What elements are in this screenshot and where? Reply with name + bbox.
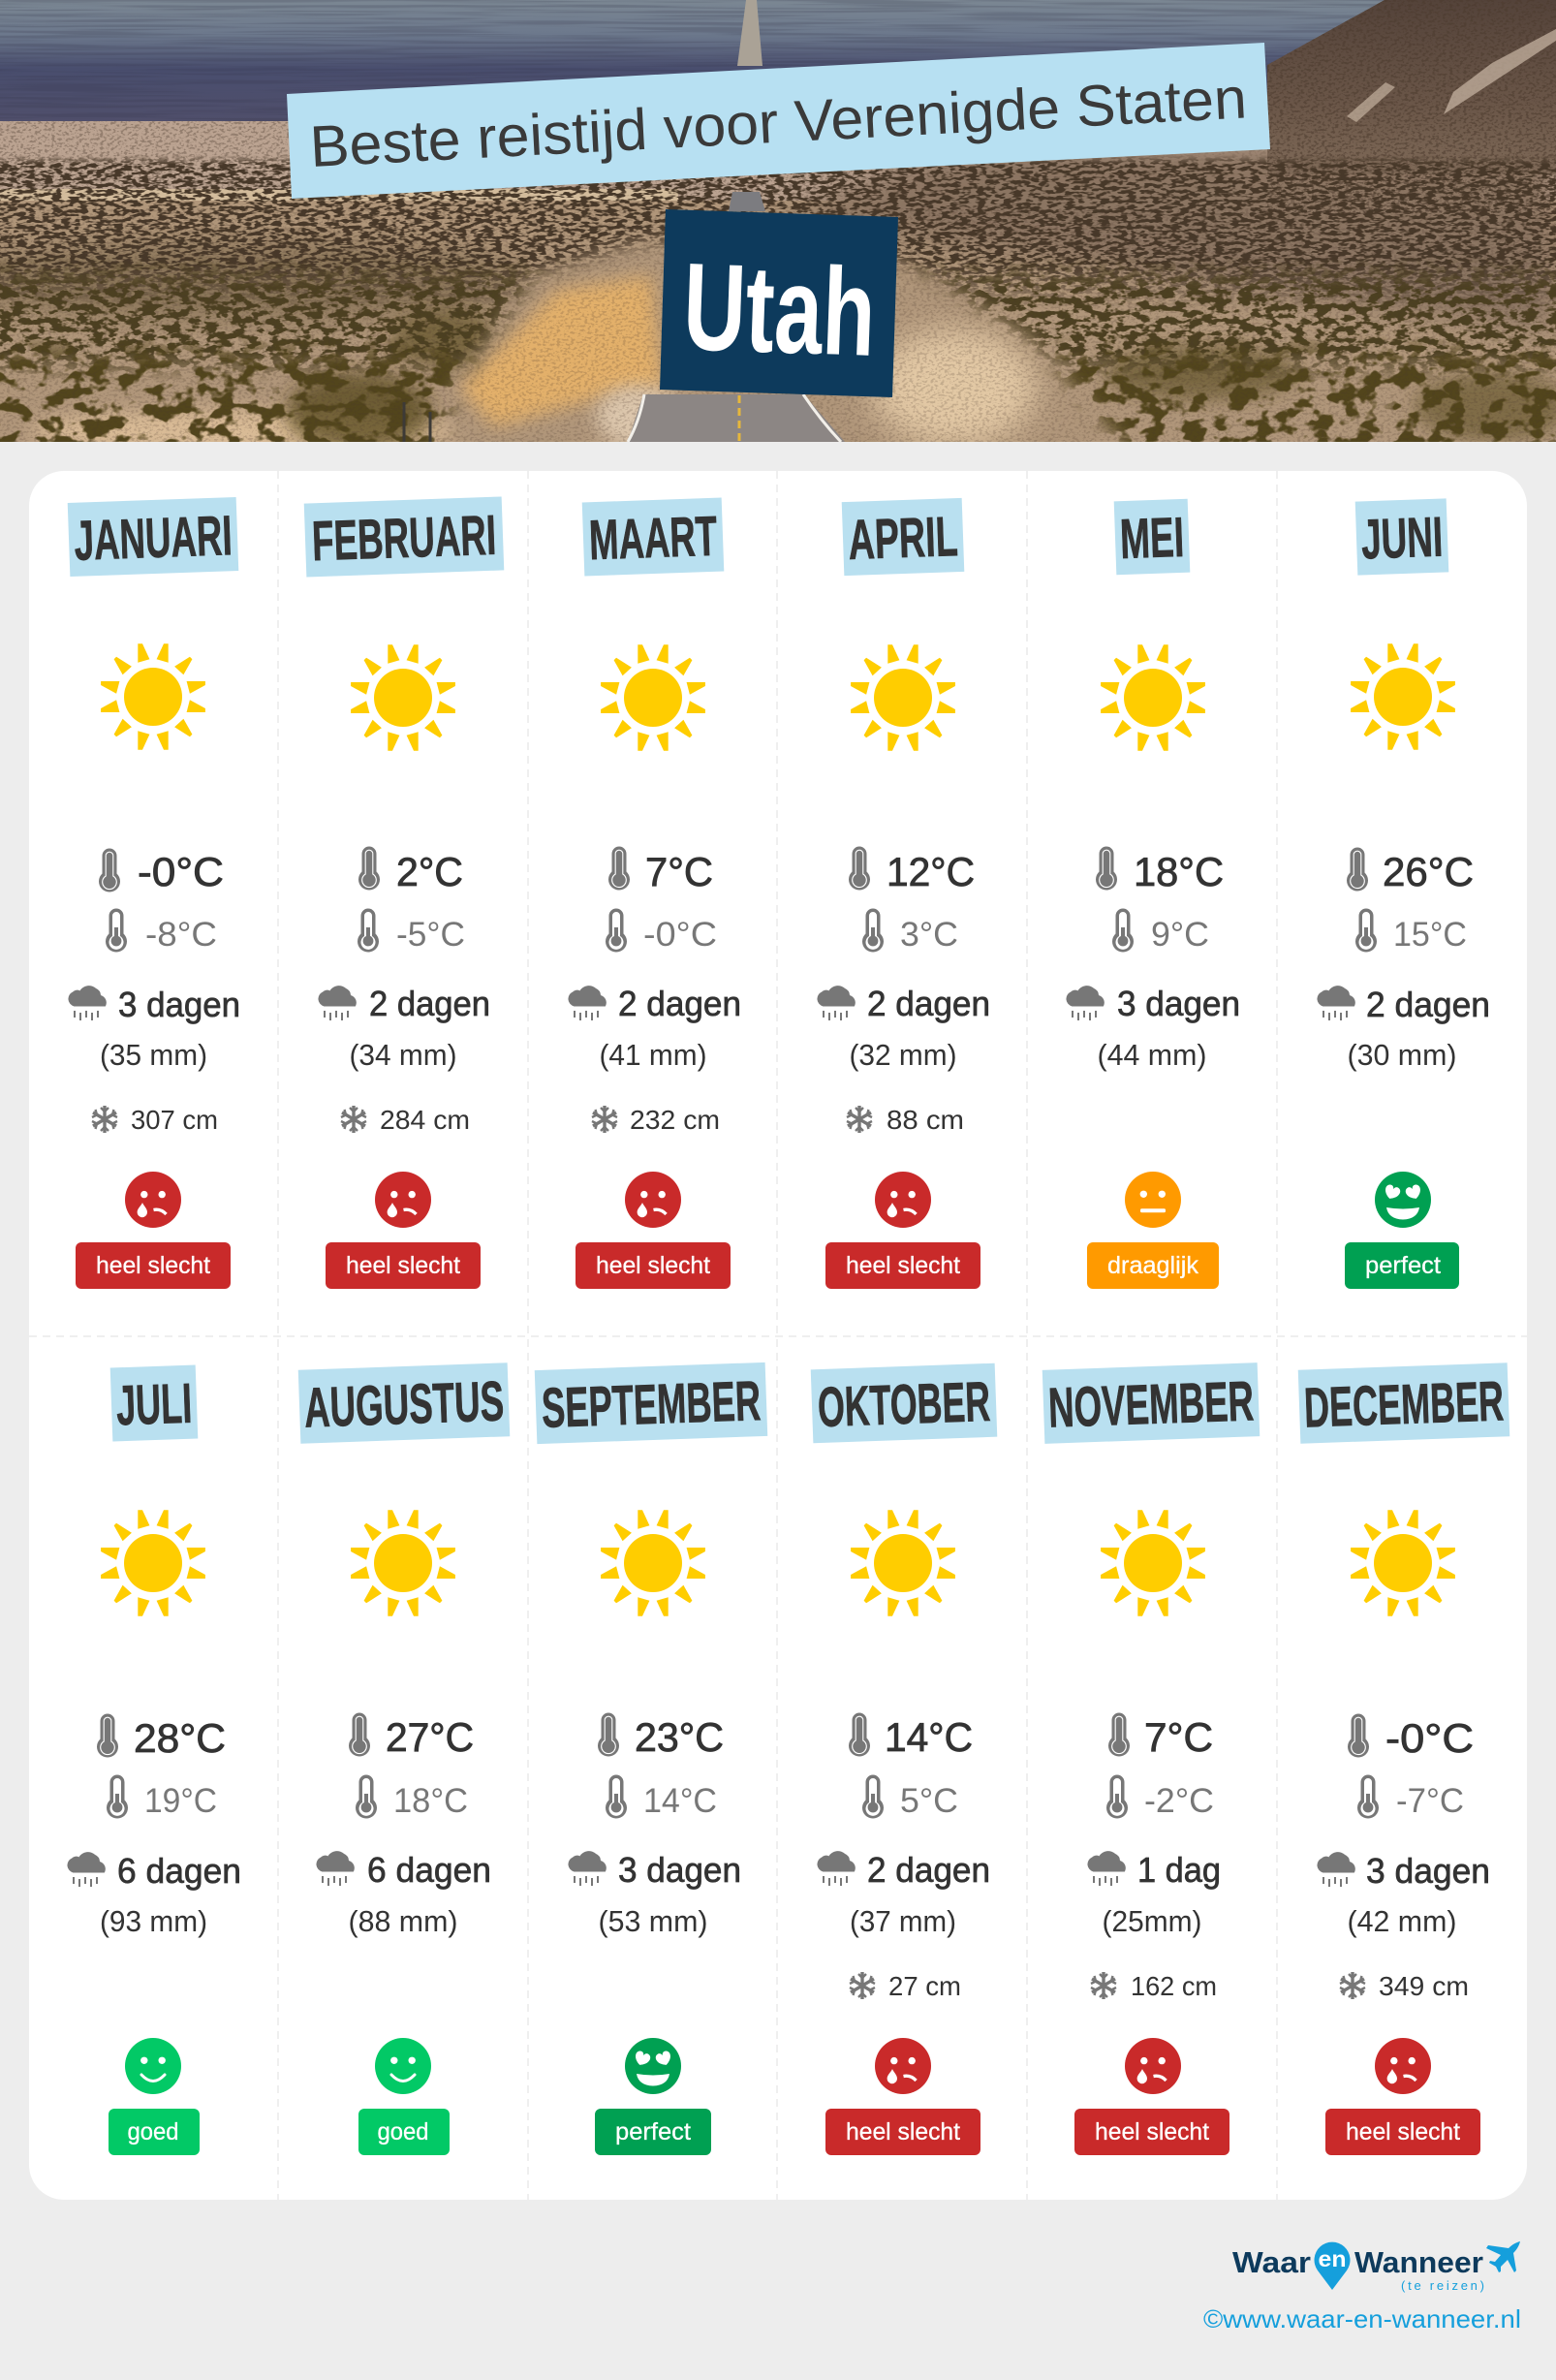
heading: OKTOBER — [817, 1370, 991, 1439]
min temperature: 9°C — [1151, 916, 1209, 954]
icon: sun — [1351, 643, 1455, 750]
month: December — [1298, 1362, 1509, 2155]
snow: 307 cm — [131, 1105, 218, 1135]
rating face — [875, 2038, 931, 2094]
heading — [1355, 498, 1448, 576]
heading — [1114, 499, 1190, 575]
max temperature — [1348, 1713, 1474, 1761]
rating badge — [109, 2109, 200, 2155]
icon: sun — [1101, 644, 1205, 751]
min temperature — [862, 1775, 958, 1820]
min temperature — [606, 909, 717, 954]
rating badge — [1074, 2109, 1229, 2155]
max temperature: -0°C — [1385, 1715, 1474, 1761]
rain days — [1087, 1850, 1221, 1890]
min temperature: 14°C — [643, 1782, 717, 1820]
rating badge — [825, 1242, 980, 1289]
icon: plane — [1486, 2241, 1520, 2272]
heading: MAART — [588, 505, 718, 572]
rating badge — [825, 2109, 980, 2155]
rating badge: heel slecht — [596, 1252, 710, 1279]
icon: sun — [601, 644, 705, 751]
rating face — [375, 1172, 431, 1228]
heading: FEBRUARI — [311, 504, 497, 573]
min temperature — [358, 909, 465, 954]
heading — [110, 1364, 198, 1442]
min temperature: 19°C — [144, 1782, 217, 1820]
max temperature — [1108, 1713, 1213, 1760]
min temperature — [1112, 909, 1209, 954]
min temperature — [862, 909, 958, 954]
min temperature — [1355, 909, 1467, 954]
icon: sun — [601, 1510, 705, 1616]
max temperature — [1347, 847, 1474, 894]
heading — [298, 1362, 510, 1444]
rating badge: heel slecht — [846, 1252, 960, 1279]
snow: 162 cm — [1131, 1971, 1217, 2001]
rating face — [1125, 2038, 1181, 2094]
rain days: 3 dagen — [1117, 984, 1240, 1023]
heading — [842, 498, 964, 576]
rainfall: (41 mm) — [599, 1038, 707, 1072]
rain days: 2 dagen — [369, 984, 490, 1023]
max temperature — [99, 849, 224, 894]
min temperature — [107, 1775, 217, 1820]
min temperature: 15°C — [1393, 916, 1467, 954]
rating badge: draaglijk — [1107, 1252, 1198, 1279]
rating badge — [326, 1242, 481, 1289]
month: Augustus — [298, 1362, 510, 2155]
rainfall: (44 mm) — [1097, 1038, 1207, 1072]
snow: 349 cm — [1379, 1971, 1469, 2001]
min temperature: -8°C — [145, 916, 217, 954]
max temperature: 12°C — [887, 849, 975, 894]
month: Maart — [568, 498, 741, 1289]
max temperature: 28°C — [134, 1715, 226, 1761]
rating badge: perfect — [1365, 1252, 1441, 1279]
rating face — [125, 1172, 181, 1228]
rating badge — [1325, 2109, 1480, 2155]
rating badge — [1087, 1242, 1219, 1289]
rating face — [125, 2038, 181, 2094]
rain days — [68, 985, 240, 1024]
rating face — [875, 1172, 931, 1228]
snow — [341, 1105, 470, 1135]
rain days: 3 dagen — [1366, 1851, 1490, 1891]
rating face — [1375, 1172, 1431, 1228]
icon: sun — [851, 644, 955, 751]
rating badge: heel slecht — [96, 1252, 210, 1279]
rainfall: (25mm) — [1103, 1904, 1201, 1938]
min temperature — [1106, 1775, 1214, 1820]
icon: map pin — [1314, 2242, 1351, 2290]
rain days: 6 dagen — [367, 1850, 491, 1890]
rating badge — [576, 1242, 731, 1289]
rating badge — [595, 2109, 711, 2155]
min temperature — [356, 1775, 468, 1820]
max temperature — [97, 1713, 226, 1761]
rain days: 2 dagen — [618, 984, 741, 1023]
heading — [304, 496, 504, 578]
heading: APRIL — [847, 505, 959, 572]
hero photo: desert road — [0, 0, 1556, 453]
rain days: 3 dagen — [618, 1850, 741, 1890]
min temperature — [106, 909, 217, 954]
rain days — [568, 984, 741, 1023]
max temperature — [1096, 847, 1224, 894]
icon: sun — [101, 1510, 205, 1616]
min temperature: 5°C — [900, 1782, 958, 1820]
rating badge — [76, 1242, 231, 1289]
rain days — [1066, 984, 1240, 1023]
month: Februari — [304, 496, 504, 1289]
min temperature: -2°C — [1144, 1782, 1214, 1820]
icon: sun — [351, 644, 455, 751]
rating badge: goed — [128, 2118, 178, 2145]
snow: 232 cm — [630, 1105, 720, 1135]
max temperature: -0°C — [138, 849, 224, 894]
max temperature — [849, 847, 975, 894]
max temperature — [608, 847, 713, 894]
darker bush masses — [0, 155, 1556, 451]
rainfall: (37 mm) — [850, 1904, 956, 1938]
min temperature — [606, 1775, 717, 1820]
max temperature: 14°C — [885, 1714, 973, 1760]
min temperature: -7°C — [1396, 1782, 1464, 1820]
rating badge: heel slecht — [346, 1252, 460, 1279]
rating badge: heel slecht — [1095, 2118, 1209, 2145]
heading — [811, 1363, 997, 1443]
min temperature: -5°C — [396, 916, 465, 954]
snow — [847, 1105, 964, 1135]
icon: map pin: en — [1318, 2246, 1347, 2271]
rating face — [1375, 2038, 1431, 2094]
max temperature: 18°C — [1134, 849, 1224, 894]
max temperature: 23°C — [635, 1714, 724, 1760]
max temperature — [598, 1713, 724, 1760]
heading: NOVEMBER — [1047, 1369, 1255, 1440]
heading: JUNI — [1360, 506, 1444, 571]
snow: 284 cm — [380, 1105, 470, 1135]
icon: sun — [1351, 1510, 1455, 1616]
rain days — [817, 1850, 990, 1890]
rain days: 2 dagen — [867, 984, 990, 1023]
month: April — [817, 498, 990, 1289]
rainfall: (32 mm) — [849, 1038, 957, 1072]
logo: Waar en Wanneer: (te reizen) — [1401, 2278, 1484, 2293]
rainfall: (93 mm) — [100, 1904, 207, 1938]
rainfall: (30 mm) — [1347, 1038, 1457, 1072]
snow — [592, 1105, 720, 1135]
month: September — [535, 1362, 767, 2155]
rain days: 2 dagen — [867, 1850, 990, 1890]
snow — [850, 1971, 961, 2001]
rating face — [625, 1172, 681, 1228]
title banner: Beste reistijd voor Verenigde Staten — [308, 65, 1248, 179]
heading: AUGUSTUS — [303, 1369, 505, 1440]
min temperature — [1357, 1775, 1464, 1820]
max temperature — [849, 1713, 973, 1760]
heading: JULI — [115, 1372, 193, 1437]
max temperature: 7°C — [1144, 1714, 1213, 1760]
rating badge — [358, 2109, 450, 2155]
rating badge: goed — [378, 2118, 428, 2145]
logo: Waar en Wanneer: Wanneer — [1354, 2245, 1483, 2279]
panel: monthly climate table — [29, 471, 1527, 2200]
rating face — [375, 2038, 431, 2094]
title banner — [287, 43, 1270, 199]
rating badge: heel slecht — [846, 2118, 960, 2145]
rating face — [625, 2038, 681, 2094]
icon: sun — [101, 643, 205, 750]
rainfall: (88 mm) — [349, 1904, 457, 1938]
rain days — [318, 984, 490, 1023]
state label: Utah — [660, 209, 898, 397]
rain days: 6 dagen — [117, 1851, 241, 1891]
rainfall: (35 mm) — [100, 1038, 207, 1072]
snow: 27 cm — [888, 1971, 961, 2001]
max temperature — [358, 847, 463, 894]
rating badge — [1345, 1242, 1459, 1289]
snow: 88 cm — [887, 1105, 964, 1135]
month: Oktober — [811, 1363, 997, 2155]
road — [737, 0, 762, 66]
rating face — [1125, 1172, 1181, 1228]
min temperature: -0°C — [643, 916, 717, 954]
snow — [1091, 1971, 1217, 2001]
month: Mei — [1066, 499, 1240, 1289]
icon: sun — [351, 1510, 455, 1616]
month: November — [1043, 1362, 1260, 2155]
max temperature: 2°C — [396, 849, 463, 894]
min temperature: 3°C — [900, 916, 958, 954]
heading — [535, 1362, 767, 1444]
max temperature: 26°C — [1383, 849, 1474, 894]
heading — [1043, 1362, 1260, 1444]
max temperature: 7°C — [645, 849, 713, 894]
icon: sun — [1101, 1510, 1205, 1616]
month: Juni — [1317, 498, 1490, 1289]
source url: ©www.waar-en-wanneer.nl — [1203, 2304, 1521, 2333]
logo: Waar en Wanneer — [1232, 2241, 1520, 2293]
icon: sun — [851, 1510, 955, 1616]
rainfall: (53 mm) — [599, 1904, 707, 1938]
heading — [582, 498, 724, 576]
rainfall: (42 mm) — [1347, 1904, 1457, 1938]
logo: Waar en Wanneer: Waar — [1232, 2245, 1311, 2279]
rain days — [568, 1850, 741, 1890]
rating badge: heel slecht — [1346, 2118, 1460, 2145]
rain days: 1 dag — [1137, 1850, 1221, 1890]
heading: JANUARI — [73, 504, 233, 573]
rain days: 3 dagen — [118, 985, 240, 1024]
rainfall: (34 mm) — [349, 1038, 457, 1072]
heading: MEI — [1119, 506, 1185, 571]
month: Januari — [68, 497, 240, 1289]
mountain — [775, 145, 1556, 329]
max temperature: 27°C — [386, 1714, 474, 1760]
rain days — [817, 984, 990, 1023]
rating badge: perfect — [615, 2118, 691, 2145]
state label: Utah: Utah — [681, 237, 878, 383]
heading — [68, 497, 238, 577]
heading: SEPTEMBER — [541, 1369, 762, 1440]
min temperature: 18°C — [393, 1782, 468, 1820]
month: Juli — [67, 1364, 241, 2155]
snow — [1340, 1971, 1469, 2001]
max temperature — [349, 1713, 474, 1760]
rain days: 2 dagen — [1366, 985, 1490, 1024]
snow — [92, 1105, 218, 1135]
